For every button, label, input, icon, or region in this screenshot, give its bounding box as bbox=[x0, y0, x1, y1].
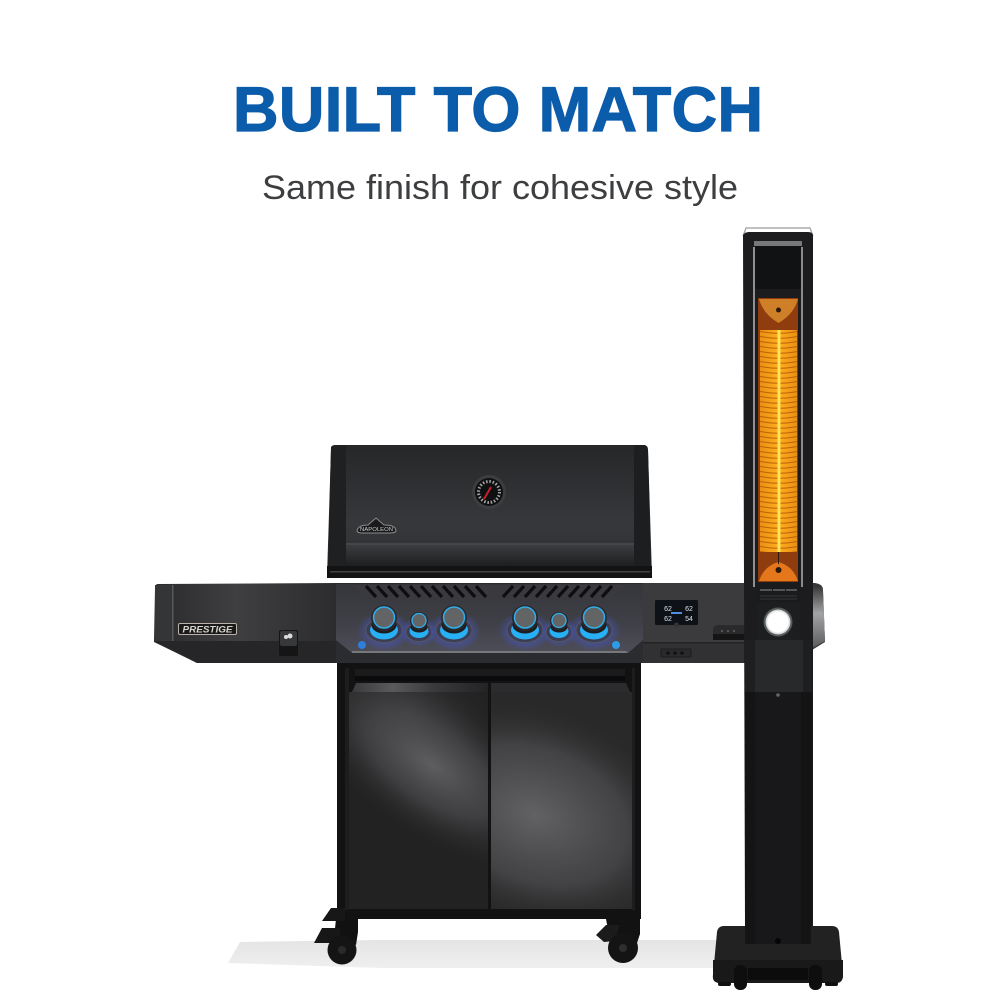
digital display: 62 bbox=[664, 606, 672, 613]
heater lamp bbox=[757, 602, 800, 640]
shelf latch bbox=[279, 630, 298, 656]
left side shelf bbox=[154, 583, 336, 663]
digital display: 54 bbox=[685, 616, 693, 623]
cart cabinet bbox=[337, 663, 641, 919]
heater lower column bbox=[745, 640, 812, 944]
knob 5 bbox=[540, 612, 578, 647]
knob 2 bbox=[400, 612, 438, 647]
heater carry handle bbox=[743, 228, 813, 236]
burner knobs bbox=[357, 605, 621, 651]
shelf switches bbox=[661, 625, 745, 657]
lid thermometer bbox=[472, 475, 506, 509]
left door bbox=[349, 692, 488, 909]
panel light buttons bbox=[358, 641, 620, 649]
digital display: 62 bbox=[664, 616, 672, 623]
Prestige badge: PRESTIGE bbox=[182, 624, 233, 636]
knob 3 bbox=[427, 605, 481, 651]
grill bbox=[154, 445, 825, 964]
subtitle: Same finish for cohesive style bbox=[262, 169, 738, 207]
heater column bbox=[743, 232, 813, 926]
right door bbox=[491, 692, 632, 909]
digital display bbox=[655, 600, 698, 628]
title: BUILT TO MATCH bbox=[233, 75, 763, 145]
right caster bbox=[596, 919, 640, 963]
left caster bbox=[314, 908, 358, 964]
Napoleon badge bbox=[357, 518, 396, 533]
knob 4 bbox=[498, 605, 552, 651]
digital display: 62 bbox=[685, 606, 693, 613]
Napoleon badge: NAPOLEON bbox=[360, 527, 393, 533]
glowing heating element bbox=[758, 298, 798, 582]
patio heater bbox=[713, 228, 843, 990]
grill lid bbox=[327, 445, 652, 578]
right side shelf bbox=[643, 583, 825, 663]
knob 1 bbox=[357, 605, 411, 651]
heater head recess bbox=[753, 241, 803, 587]
heater base bbox=[713, 926, 843, 990]
control panel bbox=[336, 583, 643, 663]
heater vent slots bbox=[756, 582, 801, 602]
knob 6 bbox=[567, 605, 621, 651]
floor shadow bbox=[228, 940, 720, 968]
